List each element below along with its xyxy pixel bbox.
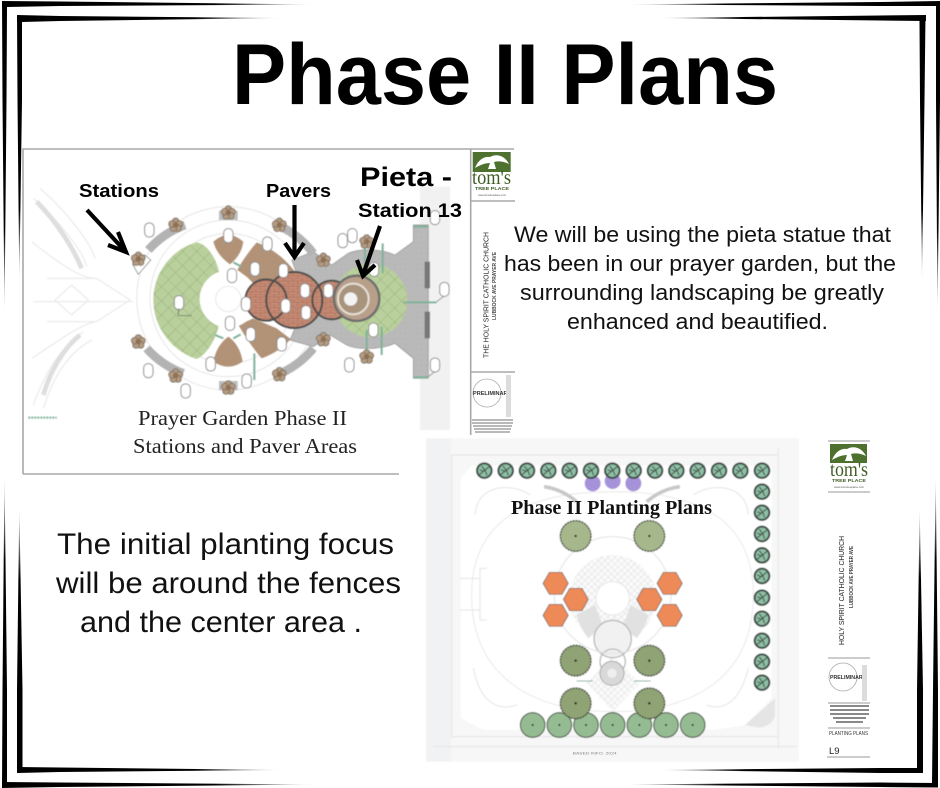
text block: planting focus: and the center area . [80, 606, 362, 639]
preliminary stamp: PRELIMINARY [473, 391, 511, 397]
frame: bottom-right corner [623, 473, 938, 788]
logo: toms tree place [830, 444, 868, 489]
logo: toms tree place: TREE PLACE [832, 478, 866, 483]
sheet number: L9 [829, 746, 840, 757]
text block: pieta description: We will be using the pieta statue that [514, 222, 891, 247]
text block: planting focus: will be around the fences [55, 567, 401, 600]
text block: planting focus [55, 528, 401, 639]
preliminary stamp [472, 375, 513, 432]
title block: planting plan [827, 441, 870, 757]
fence trees top row [477, 463, 492, 478]
panel: planting plan [426, 438, 870, 762]
gray paving [290, 225, 428, 378]
planting site drawing: BASED INFO. 2024 [573, 751, 617, 755]
orange hexagons [543, 572, 682, 626]
title block: prayer garden [472, 152, 513, 432]
green lawn left [153, 242, 219, 359]
site plan drawing [28, 187, 450, 430]
logo: toms tree place: www.tomstreeplace.com [834, 486, 864, 489]
panel: prayer garden plan [23, 149, 515, 474]
label: station 13: Station 13 [358, 201, 462, 222]
arrow: pavers [285, 205, 304, 257]
olive trees [560, 521, 665, 551]
church address: LUBBOCK AVE PRAYER AVE [849, 546, 855, 608]
center hatch area [569, 555, 656, 642]
caption: prayer garden: Stations and Paver Areas [133, 434, 357, 458]
center plaza [200, 270, 257, 328]
text block: pieta description: surrounding landscaping be greatly [520, 280, 884, 305]
disclaimer block [830, 705, 869, 723]
frame: top-right corner [627, 1, 940, 316]
logo: toms tree place: www.tomstreeplace.com [478, 194, 506, 197]
label: pavers: Pavers [266, 181, 331, 201]
frame: bottom-left corner [2, 473, 316, 788]
station bands [147, 223, 313, 375]
text block: pieta description: has been in our prayer garden, but the [504, 251, 896, 276]
fence trees right column [755, 484, 769, 499]
title: Phase II Plans [232, 27, 778, 123]
text block: pieta description [504, 222, 896, 334]
paver circles [245, 279, 287, 321]
preliminary stamp: PRELIMINARY [830, 675, 866, 681]
purple shrubs [585, 473, 641, 491]
plan frame lines [23, 149, 515, 474]
green bottom row [520, 713, 705, 737]
caption: prayer garden: Prayer Garden Phase II [138, 406, 347, 430]
label: pieta: Pieta - [360, 162, 452, 192]
pieta circle [334, 276, 379, 321]
planting site drawing [426, 438, 799, 762]
preliminary stamp [829, 663, 867, 701]
church address: LUBBOCK AVE PRAYER AVE [492, 252, 498, 320]
logo: toms tree place [472, 152, 511, 197]
caption: prayer garden [133, 406, 357, 458]
arrow: stations [87, 210, 126, 252]
teal edging [28, 227, 437, 418]
frame: top-left corner [2, 1, 316, 316]
arrow: pieta [357, 226, 380, 276]
planter roses [133, 255, 151, 274]
brown beds [213, 235, 243, 264]
logo: toms tree place: TREE PLACE [475, 186, 509, 191]
text block: pieta description: enhanced and beautified. [567, 309, 828, 334]
church name: HOLY SPIRIT CATHOLIC CHURCH [837, 536, 846, 645]
green lawn right [334, 264, 407, 337]
heading: planting plans: Phase II Planting Plans [511, 497, 712, 519]
sheet title: PLANTING PLANS [829, 731, 868, 737]
label: stations: Stations [79, 181, 159, 201]
logo: toms tree place: tom's [472, 167, 511, 189]
text block: planting focus: The initial planting focus [57, 528, 394, 561]
plant tags [145, 223, 154, 237]
logo: toms tree place: tom's [830, 459, 868, 481]
church name: THE HOLY SPIRIT CATHOLIC CHURCH [482, 232, 490, 358]
